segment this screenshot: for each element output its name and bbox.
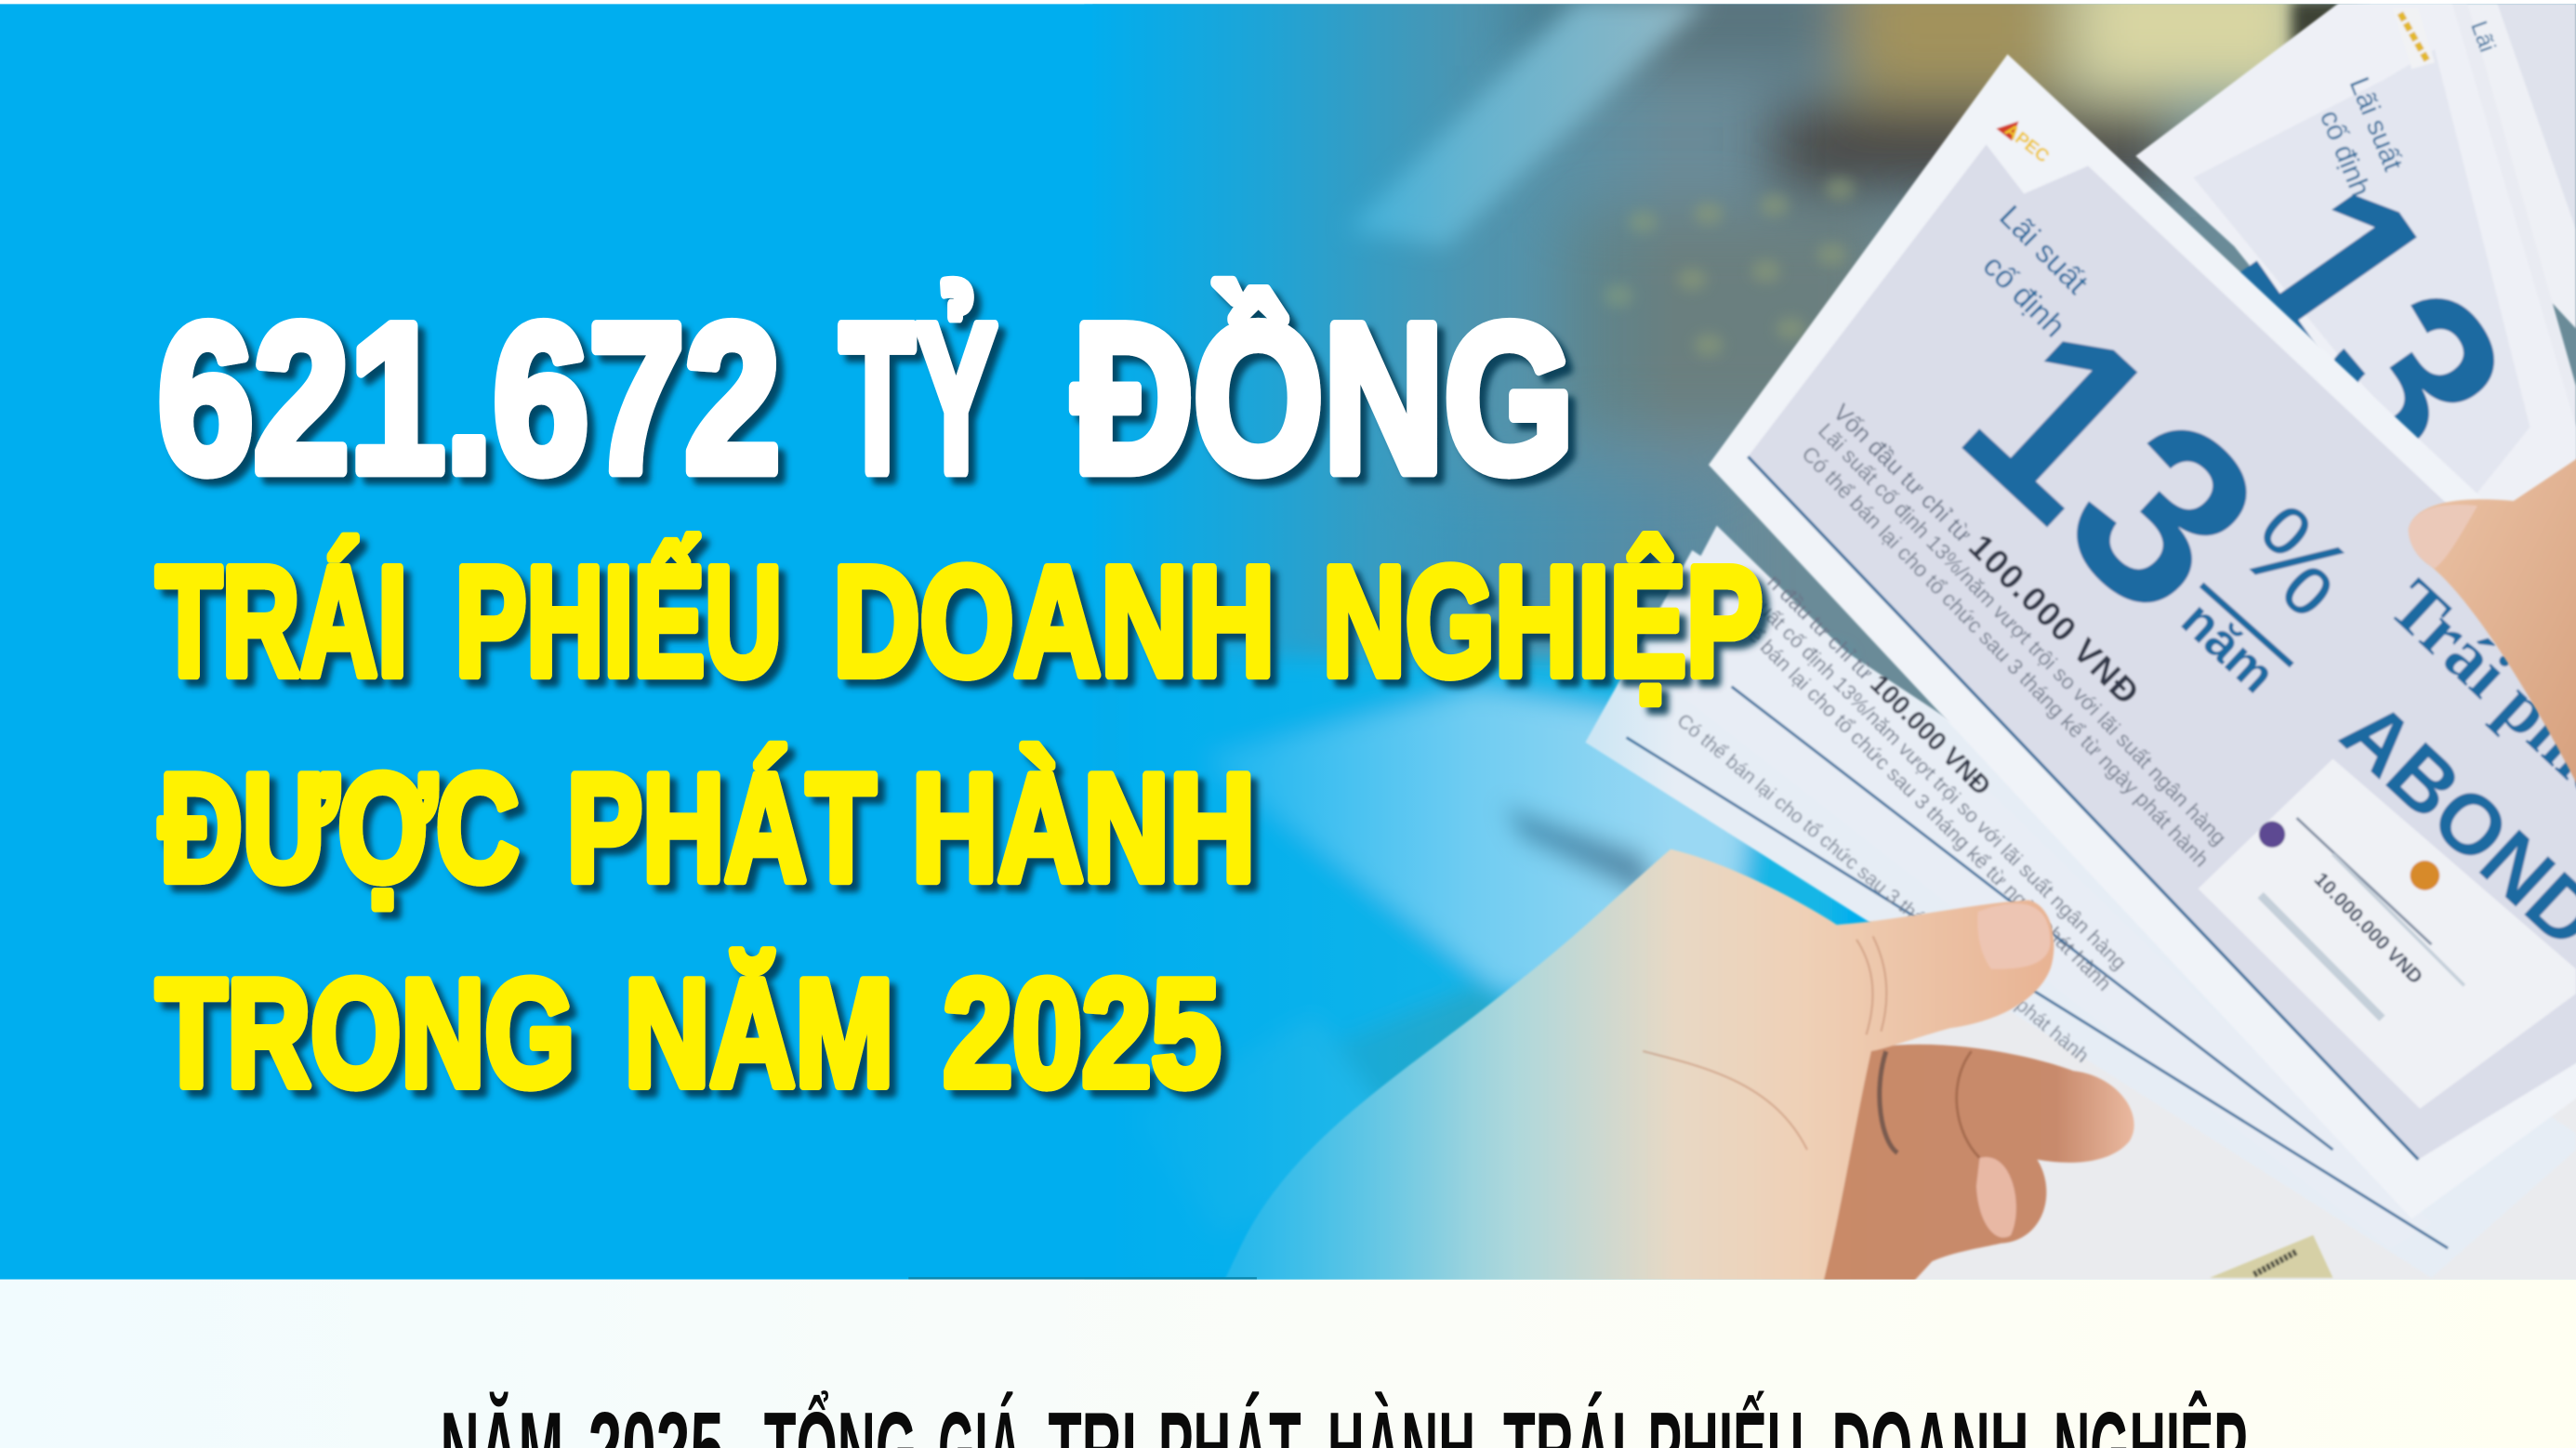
headline <box>156 280 1763 1118</box>
headline line 3: PHÁT <box>567 742 876 913</box>
percent and year: % <box>2218 481 2375 640</box>
back leaflet with partial 13: Lãi suất <box>2344 73 2409 176</box>
headline line 4: TRONG <box>156 947 575 1118</box>
stack of lower leaflets: thể bán lại cho tổ chức sau 3 tháng kể từ ngày phát hành <box>1732 611 2116 995</box>
headline line 2 <box>156 533 1763 708</box>
headline line 1: amount: TỶ <box>839 281 997 517</box>
headline line 2: DOANH <box>833 533 1275 708</box>
headline line 4: 2025 <box>943 947 1221 1118</box>
back leaflet with partial 13 <box>2135 0 2576 591</box>
palm and thumb <box>1224 849 2054 1281</box>
main leaflet <box>1709 54 2576 1218</box>
back leaflet logo <box>2392 8 2435 69</box>
fingers <box>1824 1045 2134 1281</box>
body copy: Vốn đầu tư chỉ từ 100.000 VNĐ <box>1827 391 2148 713</box>
bottom right table surface <box>1856 1002 2576 1281</box>
barcode sticker <box>2210 1235 2332 1278</box>
headline line 4 <box>156 947 1221 1118</box>
leaflet inner panel <box>1748 145 2576 1160</box>
upper right hand <box>2409 452 2576 805</box>
headline line 1: amount <box>158 280 1574 517</box>
intro text (cropped at page bottom) <box>441 1390 2248 1448</box>
lower section background <box>0 1280 2576 1448</box>
blurred desk area <box>1117 657 1840 1281</box>
main leaflet: cố định <box>1976 249 2071 344</box>
text: fixed interest: Lãi suất <box>1992 200 2094 301</box>
main leaflet: Có thể bán lại cho tổ chức sau 3 tháng kể từ ngày phát hành <box>1797 441 2213 872</box>
back leaflet with partial 13: cố định <box>2314 106 2376 201</box>
headline line 1: amount: ĐỒNG <box>1073 280 1574 517</box>
stack of lower leaflets: n đầu tư chỉ từ 100.000 VNĐ <box>1763 566 1997 801</box>
main leaflet: năm <box>2171 590 2287 704</box>
headline line 2: NGHIỆP <box>1323 533 1763 708</box>
main leaflet: Lãi suất cố định 13%/năm vượt trội so với lãi suất ngân hàng <box>1814 418 2231 849</box>
headline line 3 <box>159 742 1255 913</box>
blurred light stroke <box>1347 0 1709 246</box>
headline line 3: ĐƯỢC <box>159 742 519 913</box>
stack of lower leaflets: suất cố định 13%/năm vượt trội so với lãi suất ngân hàng <box>1747 589 2132 974</box>
stack of lower leaflets: Có thể bán lại cho tổ chức sau 3 tháng kể từ ngày phát hành <box>1672 710 2093 1067</box>
stack of lower leaflets <box>1585 526 2576 1278</box>
blurred keypad <box>1604 178 1855 356</box>
back leaflet (far right): Lãi <box>2465 18 2500 56</box>
thin teal edge at hero bottom <box>908 1277 1257 1280</box>
blue fade over photo <box>1084 0 1676 1280</box>
headline line 2: TRÁI <box>156 533 407 708</box>
headline line 3: HÀNH <box>912 742 1255 913</box>
headline line 1: amount: 621.672 <box>158 281 780 517</box>
back leaflet (far right) <box>2366 0 2576 526</box>
certificate: 10.000.000 VND <box>2310 869 2426 988</box>
big 13: 13 <box>1912 269 2311 667</box>
certificate <box>2199 758 2576 1109</box>
lower hand <box>1224 849 2134 1281</box>
headline line 2: PHIẾU <box>456 533 782 708</box>
headline line 4: NĂM <box>625 947 893 1118</box>
logo: APEC <box>2001 120 2053 167</box>
back leaflet with partial 13: 13 <box>2185 136 2560 508</box>
